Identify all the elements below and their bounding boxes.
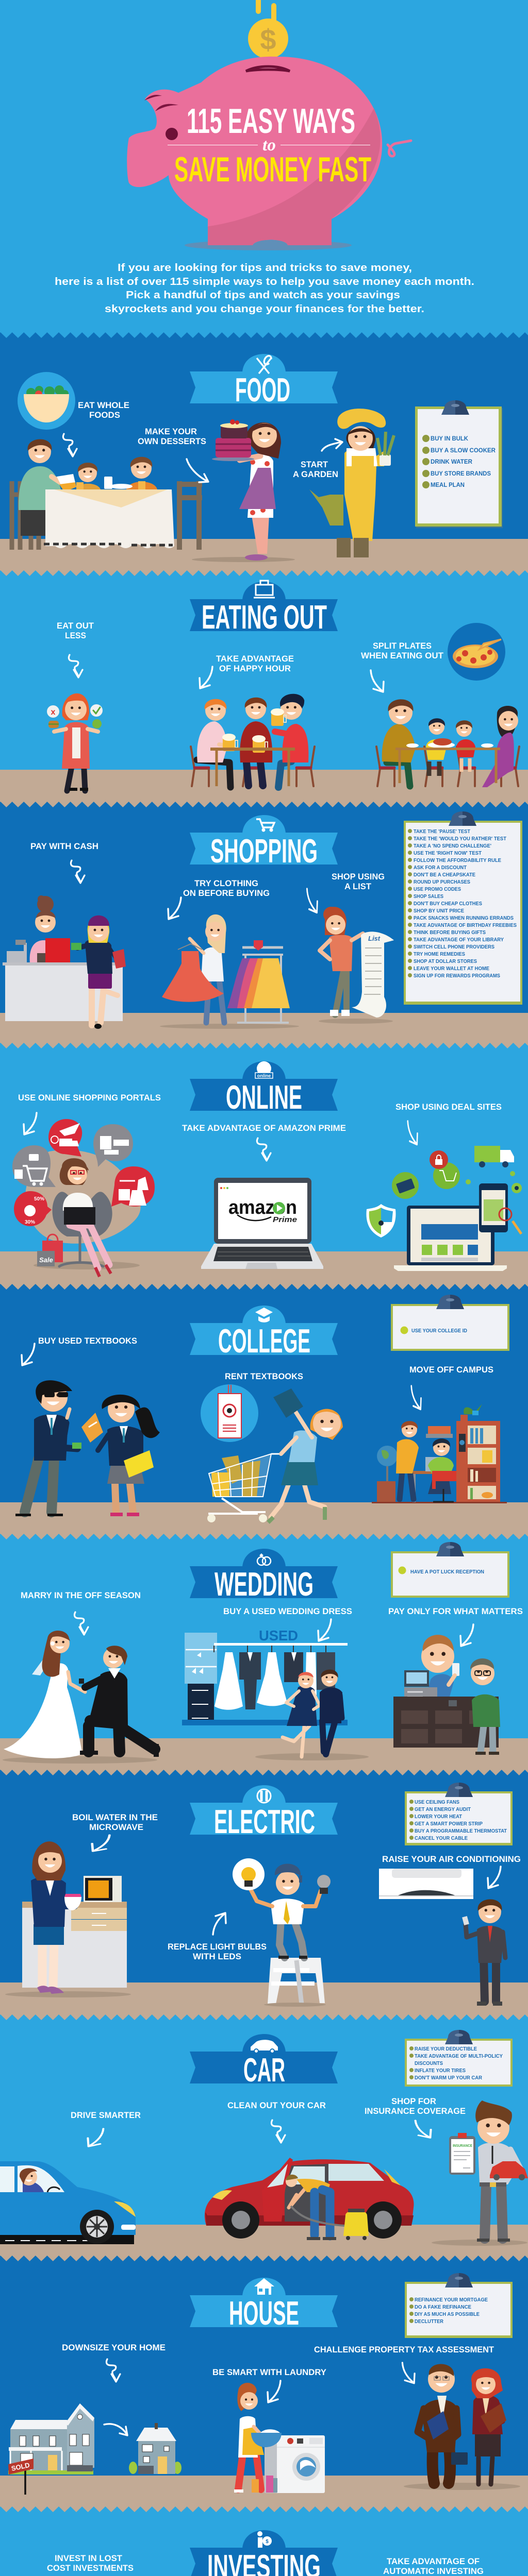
intro text: skyrockets and you change your finances for the better. <box>105 303 424 315</box>
label: drive smarter: DRIVE SMARTER <box>71 2110 141 2120</box>
illustration: falling coin <box>248 0 288 59</box>
label: downsize: DOWNSIZE YOUR HOME <box>62 2343 166 2352</box>
label: deal sites: SHOP USING DEAL SITES <box>395 1102 502 1112</box>
panel: clipboard electric tips: LOWER YOUR HEAT <box>415 1814 463 1820</box>
panel: clipboard car tips: DISCOUNTS <box>415 2060 443 2066</box>
heading: eating out <box>190 581 338 636</box>
illustration: piggy bank <box>127 57 411 250</box>
label: eat whole foods <box>78 400 129 420</box>
label: boil water: BOIL WATER IN THE <box>72 1812 158 1822</box>
label: buy used textbooks: BUY USED TEXTBOOKS <box>38 1336 137 1346</box>
label: shop for insurance coverage <box>365 2096 466 2116</box>
label: boil water <box>72 1812 158 1832</box>
panel: food <box>0 332 528 576</box>
label: shop using a list: SHOP USING <box>332 872 385 882</box>
heading: house: HOUSE <box>229 2294 299 2332</box>
label: split plates: WHEN EATING OUT <box>361 651 444 660</box>
label: invest low cost: COST INVESTMENTS <box>47 2563 134 2573</box>
heading: online: online <box>257 1073 271 1078</box>
label: eat out less <box>57 621 94 640</box>
panel: clipboard shopping tips: PACK SNACKS WHEN RUNNING ERRANDS <box>414 915 514 921</box>
label: replace light bulbs <box>168 1942 267 1961</box>
panel: shopping <box>0 802 528 1048</box>
title: to <box>262 136 276 155</box>
icon: bulb man <box>233 1858 331 2007</box>
icon: pizza <box>448 623 505 681</box>
label: start a garden: START <box>301 460 328 469</box>
illustration: family at table <box>12 439 202 550</box>
heading: online: ONLINE <box>226 1078 302 1116</box>
arrow <box>88 2129 103 2146</box>
heading: shopping <box>190 815 338 870</box>
illustration: deal sites devices <box>366 1146 522 1271</box>
panel: clipboard shopping tips: ASK FOR A DISCOUNT <box>414 865 467 871</box>
illustration: big house sold <box>8 2403 94 2495</box>
label: laundry: BE SMART WITH LAUNDRY <box>212 2367 327 2377</box>
panel: clipboard house tips: DO A FAKE REFINANCE <box>415 2304 471 2310</box>
illustration: bride and groom <box>3 1631 159 1764</box>
heading: house <box>190 2278 338 2332</box>
panel: clipboard shopping tips: TAKE ADVANTAGE OF YOUR LIBRARY <box>414 937 504 943</box>
arrow <box>488 1867 501 1888</box>
label: make your own desserts: MAKE YOUR <box>145 427 197 436</box>
heading: wedding: WEDDING <box>214 1565 314 1603</box>
label: try clothing <box>183 878 270 898</box>
label: automatic investing <box>383 2556 484 2576</box>
icon: college id card <box>201 1384 258 1442</box>
arrow <box>318 1619 331 1641</box>
arrow <box>74 1612 88 1635</box>
panel: clipboard wedding tip: HAVE A POT LUCK RECEPTION <box>410 1569 484 1575</box>
arrow <box>24 1113 37 1134</box>
title: SAVE MONEY FAST <box>174 150 371 189</box>
arrow <box>213 1913 226 1935</box>
heading: college: COLLEGE <box>218 1322 310 1360</box>
arrow <box>187 459 208 482</box>
illustration: woman choosing food <box>47 693 103 791</box>
illustration: used dress shop <box>182 1628 369 1760</box>
illustration: girl with cart <box>207 1388 343 1522</box>
panel: clipboard electric tips: GET AN ENERGY AUDIT <box>415 1806 471 1812</box>
panel: car <box>0 2014 528 2261</box>
illustration: woman shopping online: 30% <box>25 1219 35 1225</box>
illustration: woman with shopping list <box>319 907 394 1024</box>
title <box>168 101 371 189</box>
label: automatic investing: AUTOMATIC INVESTING <box>383 2566 484 2576</box>
arrow <box>168 897 181 919</box>
panel: clipboard house tips: REFINANCE YOUR MORTGAGE <box>415 2297 488 2303</box>
panel: clipboard electric tips <box>405 1783 513 1845</box>
illustration: laptop amazon <box>201 1178 323 1269</box>
icon: air conditioner <box>379 1869 473 1899</box>
label: amazon prime: TAKE ADVANTAGE OF AMAZON PRIME <box>182 1123 346 1133</box>
illustration: woman with dresses <box>160 914 299 1029</box>
panel: clipboard shopping tips: SHOP BY UNIT PRICE <box>414 908 464 914</box>
panel: electric <box>0 1770 528 2020</box>
label: replace light bulbs: WITH LEDS <box>193 1952 241 1961</box>
illustration: family at table <box>376 699 519 787</box>
panel: clipboard food tips: BUY A SLOW COOKER <box>431 448 496 454</box>
label: boil water: MICROWAVE <box>89 1822 143 1832</box>
arrow <box>200 667 212 688</box>
intro text: If you are looking for tips and tricks to save money, <box>118 262 412 274</box>
heading: college <box>190 1306 338 1360</box>
heading: eating out: EATING OUT <box>202 598 327 636</box>
illustration: laptop amazon: Prime <box>273 1215 297 1224</box>
arrow <box>307 889 317 912</box>
heading: electric: ELECTRIC <box>214 1803 315 1840</box>
label: eat whole foods: EAT WHOLE <box>78 400 129 410</box>
arrow <box>460 1624 473 1646</box>
illustration: couple with documents <box>404 2364 520 2490</box>
illustration: big house sold: SOLD <box>11 2461 30 2472</box>
arrow <box>322 439 342 451</box>
heading: electric <box>190 1785 338 1840</box>
heading: shopping: SHOPPING <box>210 832 318 870</box>
arrow <box>71 860 85 883</box>
heading: car: CAR <box>243 2051 285 2089</box>
heading: wedding <box>190 1549 338 1603</box>
arrow <box>92 1835 109 1851</box>
arrow <box>268 2381 280 2402</box>
heading: food <box>190 354 338 409</box>
arrow <box>106 2359 120 2382</box>
label: start a garden: A GARDEN <box>293 469 338 479</box>
label: split plates: SPLIT PLATES <box>373 641 432 651</box>
label: make your own desserts <box>138 427 206 446</box>
icon: salad bowl <box>18 372 75 430</box>
panel: clipboard electric tips: USE CEILING FANS <box>415 1799 459 1805</box>
panel: clipboard electric tips: BUY A PROGRAMMABLE THERMOSTAT <box>415 1828 507 1834</box>
arrow <box>104 2424 127 2435</box>
label: shop for insurance coverage: INSURANCE COVERAGE <box>365 2106 466 2116</box>
panel: clipboard electric tips: CANCEL YOUR CABLE <box>415 1835 468 1841</box>
label: take advantage of happy hour <box>216 654 294 673</box>
panel: clipboard house tips <box>405 2273 513 2338</box>
arrow <box>371 670 384 692</box>
panel: investing <box>0 2506 528 2576</box>
panel: clipboard shopping tips: USE THE 'RIGHT NOW' TEST <box>414 850 482 856</box>
label: try clothing: TRY CLOTHING <box>194 878 258 888</box>
illustration: friends at bar table <box>191 694 315 787</box>
illustration: woman with shopping list: List <box>368 935 381 942</box>
panel: clipboard food tips: BUY IN BULK <box>431 436 469 442</box>
label: pay with cash: PAY WITH CASH <box>30 841 98 851</box>
heading: investing: $ <box>266 2539 269 2545</box>
arrow <box>271 2120 285 2143</box>
panel: clipboard college tip <box>391 1295 509 1351</box>
label: move off campus: MOVE OFF CAMPUS <box>409 1365 493 1375</box>
illustration: checkout counter <box>393 1635 500 1755</box>
illustration: students trading book <box>15 1380 160 1516</box>
label: eat out less: LESS <box>65 631 86 640</box>
panel: clipboard shopping tips: LEAVE YOUR WALLET AT HOME <box>414 965 489 972</box>
arrow <box>69 655 82 677</box>
panel: clipboard shopping tips: DON'T BE A CHEAPSKATE <box>414 872 475 878</box>
panel: clipboard shopping tips: SHOP SALES <box>414 893 443 900</box>
illustration: woman shopping online: 50% <box>34 1196 44 1202</box>
label: make your own desserts: OWN DESSERTS <box>138 436 206 446</box>
arrow <box>411 1386 421 1409</box>
panel: clipboard shopping tips: SIGN UP FOR REWARDS PROGRAMS <box>414 973 500 979</box>
panel: clipboard house tips: DIY AS MUCH AS POSSIBLE <box>415 2311 480 2317</box>
label: try clothing: ON BEFORE BUYING <box>183 888 270 898</box>
illustration: gardener <box>309 409 394 557</box>
panel: online <box>0 1043 528 1290</box>
panel: wedding <box>0 1534 528 1775</box>
panel: clipboard car tips: DON'T WARM UP YOUR CAR <box>415 2075 482 2081</box>
arrow <box>402 2363 415 2383</box>
label: start a garden <box>293 460 338 479</box>
heading: online <box>190 1061 338 1116</box>
illustration: dorm room <box>372 1404 507 1503</box>
label: eat out less: EAT OUT <box>57 621 94 631</box>
label: shop using a list: A LIST <box>344 882 372 891</box>
label: split plates <box>361 641 444 660</box>
label: invest low cost <box>47 2553 134 2573</box>
panel: clipboard car tips: RAISE YOUR DEDUCTIBLE <box>415 2046 477 2052</box>
label: shop using a list <box>332 872 385 891</box>
panel: clipboard shopping tips: DON'T BUY CHEAP CLOTHES <box>414 901 482 907</box>
label: eat whole foods: FOODS <box>89 410 120 420</box>
panel: clipboard car tips: INFLATE YOUR TIRES <box>415 2067 466 2074</box>
arrow <box>408 1121 418 1144</box>
label: automatic investing: TAKE ADVANTAGE OF <box>387 2556 480 2566</box>
illustration: woman with microwave <box>5 1841 131 1997</box>
panel: clipboard shopping tips: THINK BEFORE BUYING GIFTS <box>414 929 486 936</box>
panel: clipboard shopping tips: TAKE THE 'PAUSE' TEST <box>414 828 471 835</box>
illustration: man with remote <box>462 1900 505 2006</box>
panel: clipboard food tips <box>415 400 503 528</box>
illustration: blue car <box>0 2161 136 2244</box>
label: clean out car: CLEAN OUT YOUR CAR <box>227 2100 326 2110</box>
illustration: small house <box>129 2423 182 2474</box>
illustration: woman with cake <box>192 419 295 562</box>
panel: clipboard shopping tips: SWITCH CELL PHONE PROVIDERS <box>414 944 494 950</box>
panel: clipboard shopping tips: TRY HOME REMEDIES <box>414 951 465 957</box>
label: invest low cost: INVEST IN LOST <box>55 2553 123 2563</box>
label: challenge tax: CHALLENGE PROPERTY TAX ASSESSMENT <box>314 2345 494 2354</box>
illustration: laptop amazon: amazon <box>228 1197 297 1218</box>
panel: clipboard shopping tips: TAKE THE 'WOULD YOU RATHER' TEST <box>414 836 507 842</box>
label: replace light bulbs: REPLACE LIGHT BULBS <box>168 1942 267 1952</box>
panel: clipboard shopping tips: FOLLOW THE AFFORDABILITY RULE <box>414 857 501 863</box>
illustration: insurance agent <box>432 2100 528 2246</box>
panel: clipboard car tips <box>405 2030 513 2087</box>
panel: clipboard food tips: DRINK WATER <box>431 459 473 465</box>
illustration: used dress shop: USED <box>259 1628 298 1643</box>
label: marry off season: MARRY IN THE OFF SEASON <box>21 1590 141 1600</box>
panel: clipboard shopping tips: TAKE A 'NO SPEND CHALLENGE' <box>414 843 491 849</box>
panel: clipboard shopping tips: SHOP AT DOLLAR STORES <box>414 958 477 964</box>
panel: clipboard car tips: TAKE ADVANTAGE OF MULTI-POLICY <box>415 2053 503 2059</box>
label: take advantage of happy hour: TAKE ADVANTAGE <box>216 654 294 664</box>
panel: house <box>0 2256 528 2512</box>
illustration: falling coin: $ <box>260 23 276 56</box>
panel: clipboard shopping tips: ROUND UP PURCHASES <box>414 879 470 885</box>
arrow <box>416 2121 431 2138</box>
illustration: cashier and customer <box>3 895 126 1029</box>
arrow <box>257 1138 271 1161</box>
panel: header <box>55 0 474 315</box>
intro text: here is a list of over 115 simple ways to help you save money each month. <box>55 276 474 287</box>
illustration: insurance agent: INSURANCE <box>453 2144 472 2148</box>
panel: clipboard wedding tip <box>391 1542 509 1598</box>
label: pay only: PAY ONLY FOR WHAT MATTERS <box>388 1606 523 1616</box>
panel: clipboard food tips: BUY STORE BRANDS <box>431 471 491 477</box>
label: use online shopping portals: USE ONLINE SHOPPING PORTALS <box>18 1093 161 1103</box>
arrow <box>63 434 77 456</box>
panel: eating out <box>0 570 528 807</box>
heading: food: FOOD <box>235 371 290 409</box>
label: take advantage of happy hour: OF HAPPY HOUR <box>219 664 291 673</box>
panel: clipboard college tip: USE YOUR COLLEGE ID <box>411 1328 467 1334</box>
panel: clipboard house tips: DECLUTTER <box>415 2318 443 2325</box>
label: used dress: BUY A USED WEDDING DRESS <box>223 1606 352 1616</box>
panel: clipboard food tips: MEAL PLAN <box>431 482 465 488</box>
intro text: Pick a handful of tips and watch as your savings <box>126 290 400 301</box>
label: shop for insurance coverage: SHOP FOR <box>391 2096 436 2106</box>
illustration: woman shopping online <box>12 1119 155 1277</box>
label: rent textbooks: RENT TEXTBOOKS <box>225 1371 303 1381</box>
panel: clipboard shopping tips: USE PROMO CODES <box>414 886 461 892</box>
illustration: woman choosing food: x <box>51 708 56 717</box>
panel: clipboard electric tips: GET A SMART POWER STRIP <box>415 1821 483 1827</box>
title: 115 EASY WAYS <box>187 101 355 141</box>
illustration: red car being vacuumed <box>205 2158 414 2240</box>
heading: investing <box>190 2530 338 2576</box>
illustration: woman shopping online: Sale <box>39 1256 53 1264</box>
illustration: woman doing laundry <box>234 2383 325 2493</box>
panel: clipboard shopping tips: TAKE ADVANTAGE OF BIRTHDAY FREEBIES <box>414 922 517 928</box>
intro text <box>55 262 474 315</box>
panel: clipboard shopping tips <box>404 811 522 1005</box>
label: raise air conditioning: RAISE YOUR AIR CONDITIONING <box>382 1854 521 1864</box>
arrow <box>22 1344 35 1365</box>
heading: car <box>190 2034 338 2089</box>
panel: college <box>0 1284 528 1539</box>
